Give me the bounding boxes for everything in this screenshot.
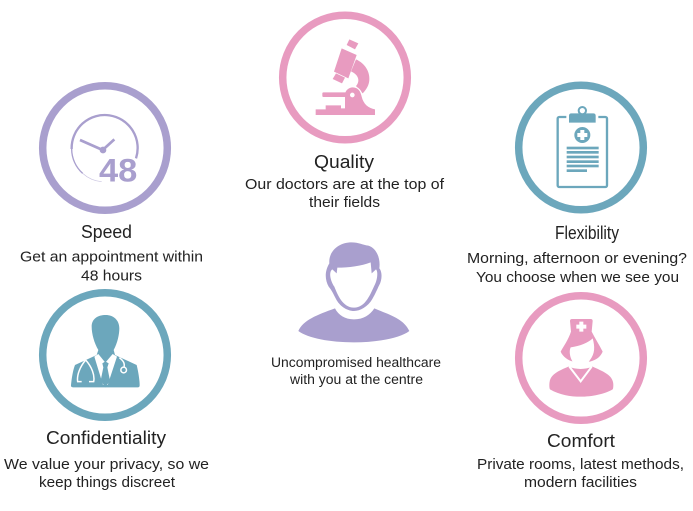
- confidentiality heading: Confidentiality: [46, 428, 166, 448]
- icon: clipboard: [558, 107, 607, 187]
- quality ring: [283, 15, 407, 140]
- speed description: Get an appointment within: [20, 250, 203, 266]
- panel: confidentiality: [4, 293, 209, 491]
- quality description: Our doctors are at the top of: [245, 177, 445, 193]
- speed description: [20, 250, 203, 284]
- confidentiality ring: [43, 293, 167, 417]
- icon: nurse: [549, 319, 613, 397]
- quality description: their fields: [309, 195, 380, 211]
- icon: doctor: [71, 315, 140, 387]
- icon: clock with 48: [72, 115, 138, 189]
- flexibility description: Morning, afternoon or evening?: [467, 251, 687, 267]
- icon: person: [298, 242, 409, 342]
- speed heading: Speed: [81, 222, 132, 242]
- confidentiality description: [4, 457, 209, 491]
- comfort ring: [519, 296, 643, 420]
- flexibility description: [467, 251, 687, 286]
- confidentiality description: keep things discreet: [39, 475, 175, 491]
- icon: microscope: [316, 39, 375, 115]
- comfort description: modern facilities: [524, 475, 637, 491]
- panel: flexibility: [467, 85, 687, 286]
- quality heading: Quality: [314, 152, 374, 172]
- flexibility ring: [519, 85, 643, 210]
- panel: comfort: [477, 296, 684, 491]
- centre caption: with you at the centre: [289, 372, 423, 387]
- comfort heading: Comfort: [547, 431, 615, 451]
- comfort description: [477, 457, 684, 491]
- centre caption: Uncompromised healthcare: [271, 355, 441, 370]
- flexibility heading: Flexibility: [555, 223, 619, 243]
- comfort description: Private rooms, latest methods,: [477, 457, 684, 473]
- speed ring: [43, 86, 167, 210]
- panel: quality: [245, 15, 445, 211]
- panel: person centre: [271, 242, 441, 387]
- centre caption: [271, 355, 441, 387]
- confidentiality description: We value your privacy, so we: [4, 457, 209, 473]
- flexibility description: You choose when we see you: [476, 270, 679, 286]
- speed description: 48 hours: [81, 268, 142, 284]
- panel: speed: [20, 86, 203, 284]
- quality description: [245, 177, 445, 211]
- icon: clock with 48: 48: [99, 153, 137, 189]
